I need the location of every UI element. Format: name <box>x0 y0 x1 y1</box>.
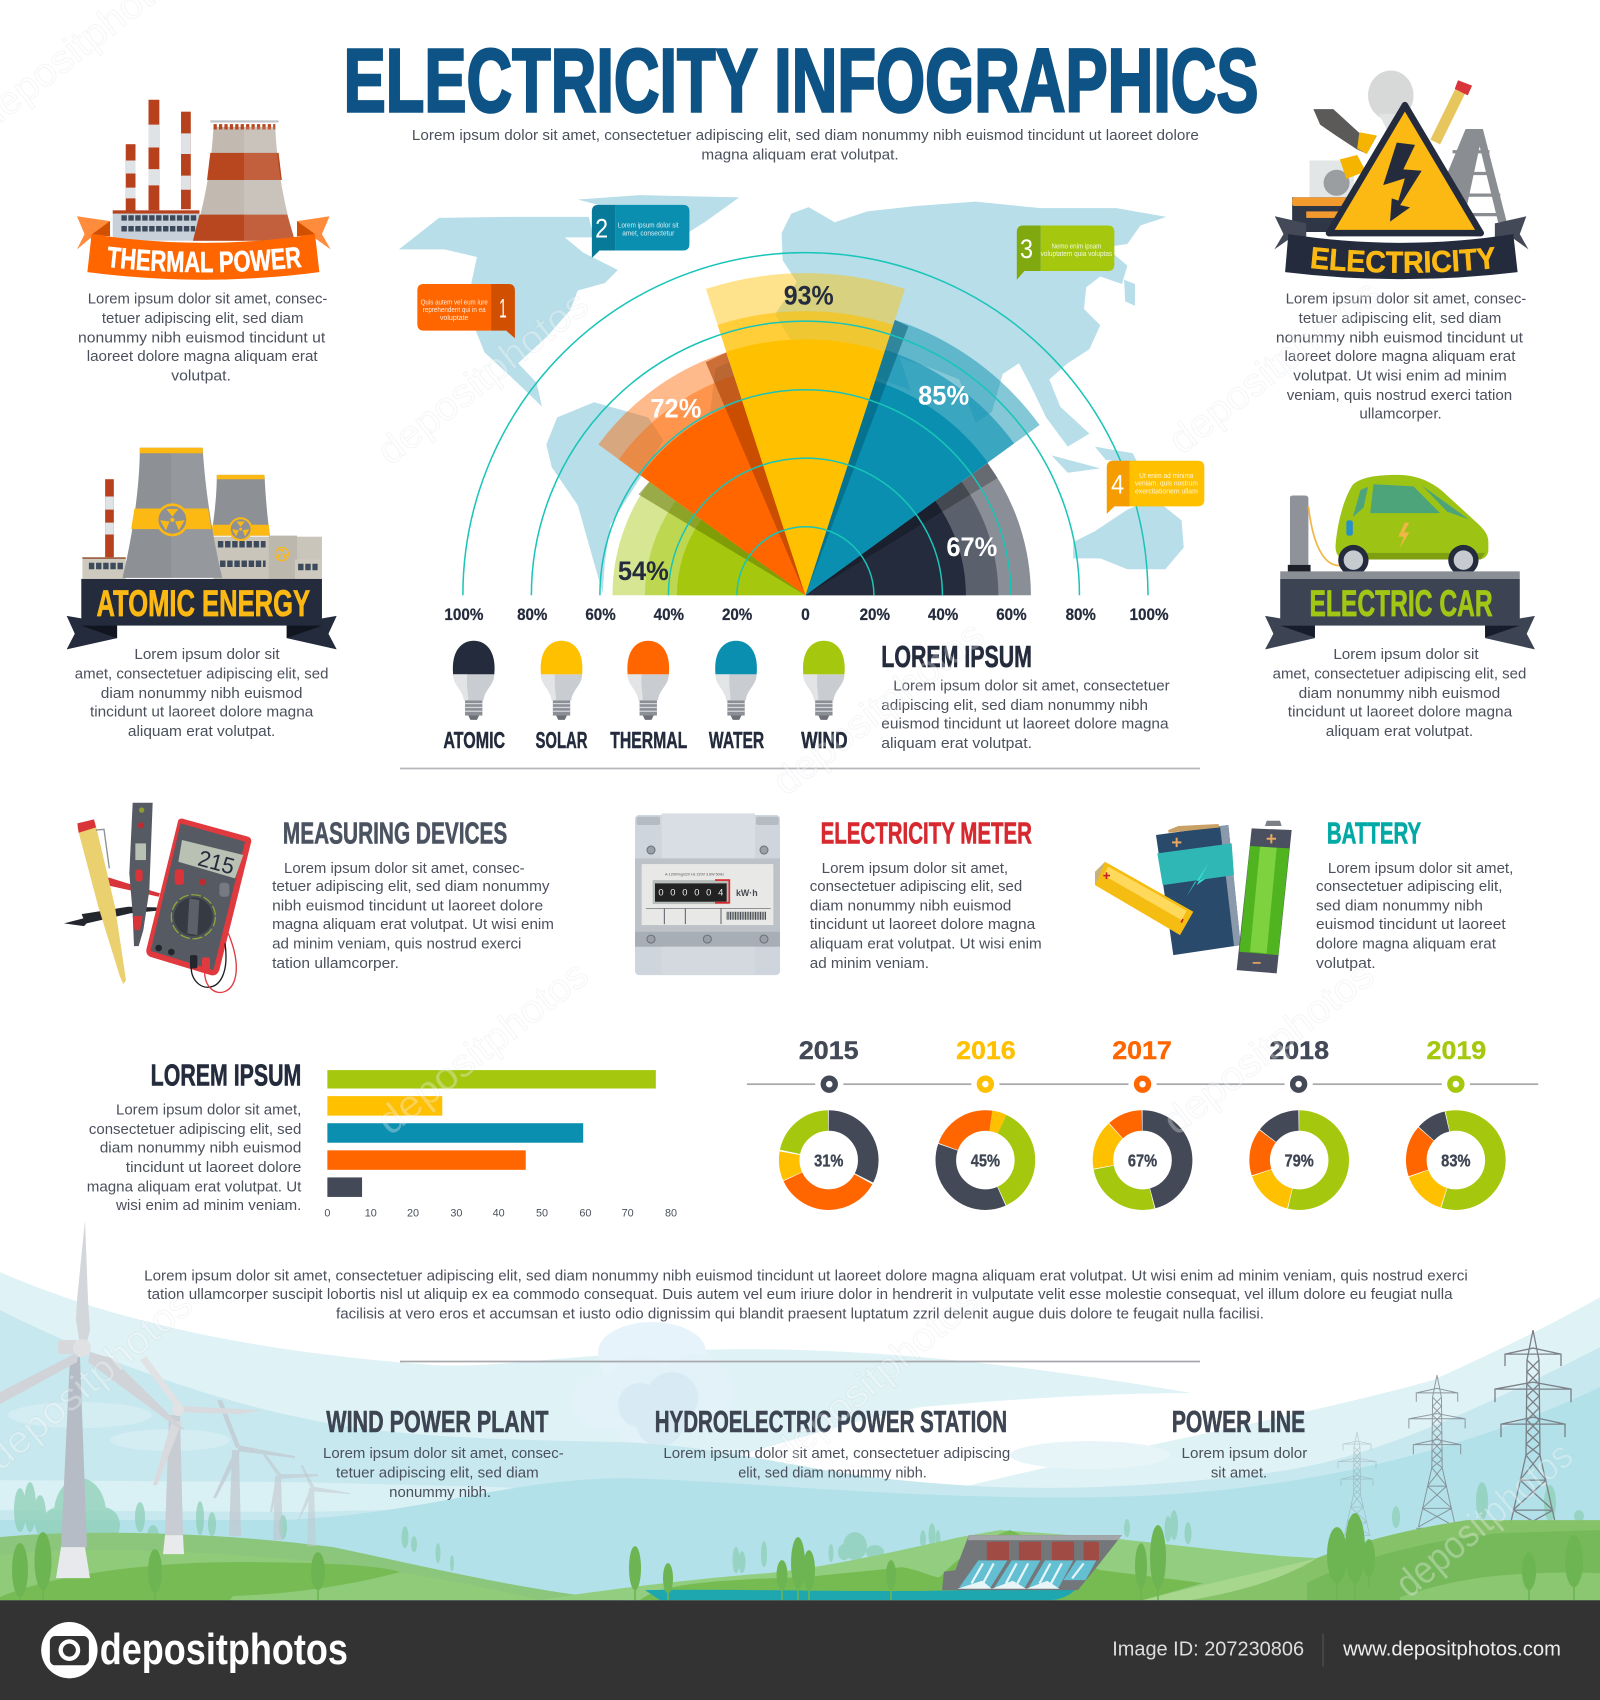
ribbon: thermal power: THERMAL POWER <box>108 246 302 272</box>
ribbon: atomic energy <box>67 579 337 649</box>
distant pale trees <box>14 1478 1584 1573</box>
callout 1: voluptate <box>440 315 469 322</box>
axis labels: 20% <box>860 606 890 624</box>
subtitle: Lorem ipsum dolor sit amet, consectetuer adipiscing elit, sed diam nonummy nibh euismod tincidunt ut laoreet dolore <box>412 127 1199 144</box>
hydroelectric dam <box>942 1535 1122 1590</box>
text: electricity meter: tincidunt ut laoreet dolore magna <box>810 916 1036 933</box>
section: wind power plant: Lorem ipsum dolor sit amet, consec- <box>323 1445 564 1462</box>
text: battery: euismod tincidunt ut laoreet <box>1316 916 1506 933</box>
text block: lorem ipsum: aliquam erat volutpat. <box>881 735 1032 752</box>
wedge: water 85% <box>805 320 1040 595</box>
value labels <box>618 281 997 586</box>
bulb solar <box>536 641 588 753</box>
subtitle <box>412 127 1199 163</box>
text: battery: volutpat. <box>1316 955 1376 972</box>
text: battery: Lorem ipsum dolor sit amet, <box>1328 860 1513 877</box>
text: electricity meter: diam nonummy nibh euismod <box>810 898 1011 915</box>
icon: meter <box>635 813 780 975</box>
callout 3: voluptatem quia voluptas <box>1041 251 1113 258</box>
text: electricity meter: aliquam erat volutpat. Ut wisi enim <box>810 936 1042 953</box>
timeline <box>747 1037 1538 1098</box>
text: electric car: amet, consectetuer adipiscing elit, sed <box>1273 666 1526 683</box>
panel: electric car <box>1265 475 1535 740</box>
text block: bar chart description: magna aliquam erat volutpat. Ut <box>87 1179 302 1196</box>
callout 4: veniam, quis nostrum <box>1135 481 1198 488</box>
section: power line <box>1172 1406 1307 1482</box>
clouds <box>572 1322 1170 1469</box>
turbine 3 <box>213 1400 295 1536</box>
icon: multimeter and testers: 215 <box>195 845 238 879</box>
axis labels: 60% <box>996 606 1027 624</box>
text: electric car: Lorem ipsum dolor sit <box>1333 646 1479 663</box>
text: battery: consectetuer adipiscing elit, <box>1316 878 1502 895</box>
bulb atomic <box>443 641 505 753</box>
watermarks: depositphotos <box>369 283 597 473</box>
text: thermal power: Lorem ipsum dolor sit amet, consec- <box>88 291 327 308</box>
bulb atomic: ATOMIC <box>443 727 505 753</box>
watermarks: depositphotos <box>1161 272 1388 462</box>
donut 2015: 31% <box>814 1151 843 1171</box>
text: electricity: volutpat. Ut wisi enim ad minim <box>1293 368 1507 385</box>
panel: electricity meter <box>635 813 1042 975</box>
axis labels: 20% <box>722 606 753 624</box>
ribbon: electric car <box>1265 571 1535 649</box>
axis labels: 80% <box>1066 606 1096 624</box>
text: electricity: laoreet dolore magna aliquam erat <box>1285 348 1516 365</box>
paragraph: bottom description: Lorem ipsum dolor sit amet, consectetuer adipiscing elit, sed diam nonummy nibh euismod tincidunt ut laoreet dolore magna aliquam erat volutpat. Ut wisi enim ad minim veniam, quis nostrud exerci <box>144 1267 1468 1284</box>
ribbon: atomic energy: ATOMIC ENERGY <box>96 583 310 624</box>
panel: atomic energy <box>67 448 337 740</box>
donut 2016: 45% <box>971 1151 1000 1171</box>
text: electricity: ullamcorper. <box>1359 405 1442 422</box>
callout 1: 1 <box>499 293 507 324</box>
axis labels: 80% <box>517 606 548 624</box>
bar axis: 40 <box>493 1207 505 1219</box>
bulb water <box>709 641 764 753</box>
bulb solar: SOLAR <box>536 727 588 753</box>
donut 2019 <box>1416 1121 1495 1200</box>
text block: lorem ipsum <box>881 641 1170 752</box>
text: electric car: tincidunt ut laoreet dolore magna <box>1288 704 1513 721</box>
wedge: wind 54% <box>612 482 805 595</box>
axis labels <box>444 606 1169 624</box>
image id: Image ID: 207230806 <box>1112 1638 1304 1661</box>
section: wind power plant <box>323 1406 564 1501</box>
bar axis <box>324 1207 677 1219</box>
callout 3: 3 <box>1020 233 1033 264</box>
callout 4: 4 <box>1111 468 1124 499</box>
years: 2017 <box>1112 1037 1172 1065</box>
paragraph: bottom description <box>144 1267 1468 1322</box>
text block: bar chart description: LOREM IPSUM <box>151 1059 301 1092</box>
text: atomic energy: diam nonummy nibh euismod <box>101 685 302 702</box>
section: wind power plant: nonummy nibh. <box>389 1484 491 1501</box>
foreground trees <box>12 1513 1583 1600</box>
callout 4: exercitationem ullam <box>1135 488 1198 495</box>
icon: thermal power plant <box>113 100 295 241</box>
icon: multimeter and testers <box>64 803 251 992</box>
text: electric car <box>1273 646 1526 740</box>
wind turbines <box>0 1220 350 1578</box>
ribbon: electricity <box>1274 216 1528 280</box>
text block: bar chart description <box>87 1059 302 1214</box>
axis labels: 0 <box>801 606 810 624</box>
text: measuring devices <box>272 860 554 972</box>
text: thermal power: nonummy nibh euismod tincidunt ut <box>78 330 326 347</box>
radial chart <box>444 253 1169 624</box>
callout 3: Nemo enim ipsam <box>1051 243 1101 250</box>
donut 2019: 83% <box>1441 1151 1470 1171</box>
heading: measuring devices: MEASURING DEVICES <box>283 817 507 850</box>
text: electricity meter <box>810 860 1042 972</box>
wedge: thermal 72% <box>598 352 805 595</box>
site url: www.depositphotos.com <box>1342 1638 1561 1661</box>
text: atomic energy <box>75 646 328 740</box>
text: electricity <box>1276 291 1526 422</box>
text: electric car: diam nonummy nibh euismod <box>1299 685 1500 702</box>
turbine 1 <box>0 1220 185 1578</box>
bar axis: 80 <box>665 1207 677 1219</box>
text: electricity meter: ad minim veniam. <box>810 955 929 972</box>
text block: bar chart description: diam nonummy nibh euismod <box>100 1139 301 1156</box>
text: thermal power <box>78 291 327 385</box>
value labels: 72% <box>650 393 701 423</box>
section: wind power plant: WIND POWER PLANT <box>326 1406 549 1439</box>
heading: electricity meter: ELECTRICITY METER <box>821 817 1032 850</box>
text: atomic energy: amet, consectetuer adipiscing elit, sed <box>75 666 328 683</box>
bulb wind: WIND <box>801 727 848 753</box>
text: thermal power: volutpat. <box>171 368 231 385</box>
value labels: 85% <box>918 380 969 410</box>
callout 2: 2 <box>595 212 608 243</box>
section: hydroelectric power station: HYDROELECTRIC POWER STATION <box>655 1406 1007 1439</box>
value labels: 67% <box>946 532 997 562</box>
axis labels: 40% <box>654 606 685 624</box>
icon: electric car charging <box>1288 475 1488 575</box>
text: measuring devices: tation ullamcorper. <box>272 955 399 972</box>
watermarks: depositphotos <box>765 613 992 804</box>
ribbon: thermal power <box>77 216 330 280</box>
donut 2016 <box>946 1121 1025 1200</box>
bar axis: 60 <box>579 1207 591 1219</box>
subtitle: magna aliquam erat volutpat. <box>701 146 899 163</box>
icon: nuclear plant <box>82 448 322 579</box>
bulb wind <box>801 641 848 753</box>
text: battery: sed diam nonummy nibh <box>1316 898 1483 915</box>
donut 2018: 79% <box>1285 1151 1314 1171</box>
bulb water: WATER <box>709 727 764 753</box>
section: power line: POWER LINE <box>1172 1406 1305 1439</box>
callout 2 <box>592 205 689 258</box>
bar axis: 30 <box>450 1207 462 1219</box>
turbine 4 <box>263 1454 318 1540</box>
text: measuring devices: tetuer adipiscing elit, sed diam nonummy <box>272 878 550 895</box>
power line pylons <box>1338 1330 1571 1537</box>
text: atomic energy: Lorem ipsum dolor sit <box>134 646 280 663</box>
panel: electricity <box>1274 70 1528 422</box>
section: hydroelectric power station <box>655 1406 1010 1482</box>
logo <box>41 1622 348 1678</box>
text: electricity meter: Lorem ipsum dolor sit amet, <box>822 860 1008 877</box>
text: electricity: Lorem ipsum dolor sit amet, consec- <box>1286 291 1526 308</box>
donut 2015 <box>789 1121 868 1200</box>
text: electricity: nonummy nibh euismod tincidunt ut <box>1276 330 1524 347</box>
icon: meter: kW·h <box>736 888 758 898</box>
section: hydroelectric power station: Lorem ipsum dolor sit amet, consectetuer adipiscing <box>663 1445 1010 1462</box>
watermarks: depositphotos <box>764 1279 987 1476</box>
donut 2017 <box>1103 1121 1182 1200</box>
text: battery: dolore magna aliquam erat <box>1316 936 1497 953</box>
text block: bar chart description: tincidunt ut laoreet dolore <box>126 1159 301 1176</box>
axis labels: 40% <box>928 606 959 624</box>
axis labels: 100% <box>444 606 484 624</box>
callout 2: amet, consectetur <box>622 230 675 237</box>
callout 3 <box>1017 226 1114 280</box>
text block: bar chart description: consectetuer adipiscing elit, sed <box>89 1121 301 1138</box>
text block: lorem ipsum: adipiscing elit, sed diam nonummy nibh <box>881 697 1148 714</box>
heading: battery: BATTERY <box>1327 817 1421 850</box>
donut 2017: 67% <box>1128 1151 1157 1171</box>
years: 2019 <box>1427 1037 1486 1065</box>
footer bar <box>0 1600 1600 1700</box>
years <box>799 1037 1486 1065</box>
text: electricity meter: consectetuer adipiscing elit, sed <box>810 878 1022 895</box>
bulb thermal <box>610 641 687 753</box>
callout 4: Ut enim ad minima <box>1139 473 1194 480</box>
watermarks: depositphotos <box>1155 953 1382 1143</box>
text: thermal power: tetuer adipiscing elit, sed diam <box>102 310 304 327</box>
icon: meter: 000004 <box>658 888 723 898</box>
logo: depositphotos <box>100 1626 348 1674</box>
green hills <box>0 1520 1600 1600</box>
bar axis: 10 <box>365 1207 377 1219</box>
text block: lorem ipsum: euismod tincidunt ut laoreet dolore magna <box>881 716 1169 733</box>
wedge: solar 93% <box>706 273 905 595</box>
percentage arcs <box>463 253 1148 595</box>
text: atomic energy: tincidunt ut laoreet dolore magna <box>90 704 314 721</box>
bar axis: 0 <box>324 1207 330 1219</box>
text: measuring devices: nibh euismod tincidunt ut laoreet dolore <box>272 898 543 915</box>
callout 2: Lorem ipsum dolor sit <box>618 223 679 230</box>
section: power line: sit amet. <box>1211 1465 1267 1482</box>
text: electricity: veniam, quis nostrud exerci tation <box>1287 387 1512 404</box>
years: 2015 <box>799 1037 859 1065</box>
bar axis: 70 <box>622 1207 634 1219</box>
callout 1: Quis autem vel eum iure <box>421 300 488 307</box>
bar chart <box>324 1070 677 1219</box>
icon: meter: A-1200/mg/220 Hz 220V 3.6W 50Hz <box>665 872 724 876</box>
bar axis: 50 <box>536 1207 548 1219</box>
text: electricity: tetuer adipiscing elit, sed diam <box>1299 310 1501 327</box>
ribbon: electric car: ELECTRIC CAR <box>1309 583 1493 624</box>
bar axis: 20 <box>407 1207 419 1219</box>
callout 1 <box>417 284 515 338</box>
wedge: atomic 67% <box>805 463 1031 595</box>
paragraph: bottom description: facilisis at vero eros et accumsan et iusto odio dignissim qui blandit praesent luptatum zzril delenit augue duis dolore te feugait nulla facilisi. <box>336 1305 1264 1322</box>
years: 2016 <box>956 1037 1016 1065</box>
watermarks: depositphotos <box>1387 1434 1581 1606</box>
years: 2018 <box>1269 1037 1329 1065</box>
world map <box>399 195 1184 593</box>
value labels: 93% <box>784 281 834 311</box>
turbine 2 <box>140 1356 262 1554</box>
axis labels: 100% <box>1130 606 1169 624</box>
mid blue hills <box>0 1310 1600 1620</box>
callout 4 <box>1107 461 1204 514</box>
timeline markers <box>815 1070 1470 1098</box>
section: hydroelectric power station: elit, sed diam nonummy nibh. <box>738 1465 927 1482</box>
pale sky hills <box>0 1272 1600 1620</box>
text: battery <box>1316 860 1513 972</box>
text: thermal power: laoreet dolore magna aliquam erat <box>87 348 318 365</box>
text block: lorem ipsum: Lorem ipsum dolor sit amet, consectetuer <box>893 678 1170 695</box>
panel: measuring devices <box>64 803 554 992</box>
text block: lorem ipsum: LOREM IPSUM <box>881 641 1032 674</box>
ribbon: electricity: ELECTRICITY <box>1311 246 1495 273</box>
text: electric car: aliquam erat volutpat. <box>1326 723 1473 740</box>
watermarks: depositphotos <box>369 953 597 1143</box>
text: measuring devices: magna aliquam erat volutpat. Ut wisi enim <box>272 916 554 933</box>
text: measuring devices: Lorem ipsum dolor sit amet, consec- <box>284 860 525 877</box>
axis labels: 60% <box>585 606 616 624</box>
bulb thermal: THERMAL <box>610 727 687 753</box>
value labels: 54% <box>618 556 669 586</box>
text: measuring devices: ad minim veniam, quis nostrud exerci <box>272 936 521 953</box>
section: wind power plant: tetuer adipiscing elit, sed diam <box>336 1465 539 1482</box>
panel: thermal power <box>77 100 330 385</box>
panel: battery <box>1095 817 1513 973</box>
icon: electricity tools <box>1292 70 1507 233</box>
donut 2018 <box>1260 1121 1339 1200</box>
text: atomic energy: aliquam erat volutpat. <box>128 723 275 740</box>
legend: bulbs <box>443 641 848 753</box>
text block: bar chart description: wisi enim ad minim veniam. <box>115 1197 301 1214</box>
landscape background <box>0 1220 1600 1620</box>
text block: bar chart description: Lorem ipsum dolor sit amet, <box>116 1102 301 1119</box>
paragraph: bottom description: tation ullamcorper suscipit lobortis nisl ut aliquip ex ea commodo consequat. Duis autem vel eum iriure dolor in hendrerit in vulputate velit esse molestie consequat, vel illum dolore eu feugiat nulla <box>147 1286 1453 1303</box>
icon: batteries <box>1095 821 1292 973</box>
turbine 5 <box>298 1465 350 1546</box>
section: power line: Lorem ipsum dolor <box>1182 1445 1307 1462</box>
callout 1: reprehendent qui in ea <box>423 307 486 314</box>
